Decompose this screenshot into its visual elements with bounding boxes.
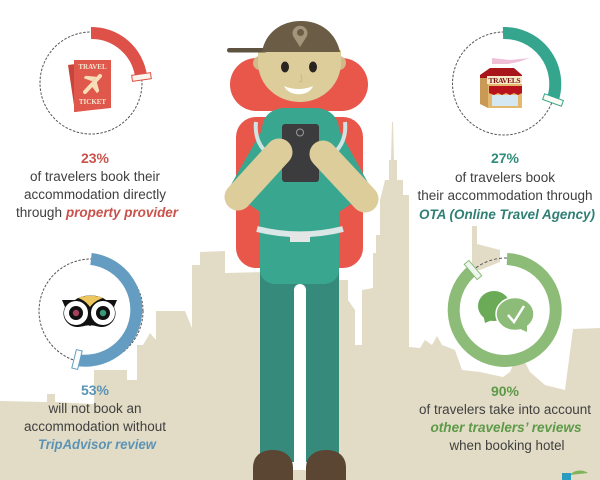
- cap brim: [227, 48, 267, 52]
- smile: [284, 86, 313, 94]
- dashed ring: [40, 32, 142, 134]
- panel: traveler reviews stat: [419, 258, 591, 453]
- city skyline background: [0, 122, 600, 480]
- dashed ring segment: [473, 258, 507, 270]
- phone camera: [296, 129, 304, 136]
- cap pin hole: [297, 29, 304, 36]
- arc end tab: [72, 350, 82, 369]
- sign text: TRAVELS: [488, 76, 520, 85]
- front speech bubble: [496, 298, 534, 330]
- right arm: [323, 154, 365, 199]
- percentage: 27%: [491, 150, 520, 166]
- small tower behind green ring: [472, 226, 500, 270]
- right eye white: [91, 301, 115, 325]
- belt: [257, 229, 343, 234]
- small corner logo: [562, 471, 588, 480]
- panel: online travel agency stat: [418, 32, 595, 222]
- description: of travelers take into account: [419, 402, 591, 417]
- nose: [299, 74, 302, 82]
- owl forehead: [78, 296, 103, 307]
- ticket back: [68, 62, 90, 112]
- flag: [492, 58, 530, 64]
- check mark: [508, 306, 524, 322]
- description: will not book an: [48, 401, 142, 416]
- left shoe: [253, 450, 293, 480]
- dashed ring: [452, 32, 556, 135]
- ticket label: TICKET: [79, 98, 106, 106]
- teal progress arc: [503, 33, 555, 99]
- right shoe: [306, 450, 346, 480]
- description: through: [16, 205, 62, 220]
- left ear: [253, 56, 267, 70]
- description: property provider: [65, 205, 179, 220]
- right iris: [100, 310, 106, 316]
- logo block: [562, 473, 571, 480]
- logo hill: [570, 471, 588, 475]
- description: [16, 169, 179, 220]
- roof: [480, 68, 522, 78]
- arc end tab: [543, 94, 563, 106]
- percentage: 23%: [81, 150, 110, 166]
- description: their accommodation through: [418, 188, 592, 203]
- backpack bedroll: [230, 58, 368, 111]
- airplane glyph: [84, 76, 100, 93]
- description: other travelers’ reviews: [430, 420, 582, 435]
- belt buckle: [290, 232, 310, 242]
- torso shirt: [228, 108, 372, 284]
- panel: property provider stat: [16, 32, 179, 220]
- description: accommodation without: [24, 419, 166, 434]
- ticket front: [74, 60, 111, 112]
- right backpack strap: [337, 122, 345, 150]
- left iris: [73, 310, 79, 316]
- ticket title: TRAVEL: [78, 63, 107, 71]
- panel: TripAdvisor stat: [24, 259, 166, 452]
- cap dome: [262, 21, 340, 52]
- description: OTA (Online Travel Agency): [419, 207, 595, 222]
- left eye ring: [69, 306, 83, 320]
- description: [419, 402, 591, 453]
- right ear: [332, 56, 346, 70]
- description: [418, 170, 595, 222]
- green progress arc: [454, 259, 556, 361]
- shop side wall: [480, 74, 488, 108]
- traveler figure: [227, 21, 372, 480]
- left eye: [281, 62, 289, 72]
- back speech bubble: [478, 291, 510, 323]
- blue progress arc: [77, 259, 136, 361]
- legs: [260, 270, 339, 462]
- left eye white: [64, 301, 88, 325]
- description: of travelers book their: [30, 169, 161, 184]
- description: when booking hotel: [449, 438, 564, 453]
- arc end tab: [464, 260, 482, 280]
- description: of travelers book: [455, 170, 555, 185]
- icon: TripAdvisor owl: [62, 296, 117, 327]
- shop sign: [487, 76, 522, 84]
- description: accommodation directly: [24, 187, 166, 202]
- dashed ring: [39, 259, 143, 363]
- shop front wall: [488, 76, 522, 108]
- red progress arc: [91, 33, 141, 76]
- left backpack strap: [256, 122, 264, 150]
- cap location pin: [292, 26, 308, 47]
- icon: travels shop: [480, 58, 530, 108]
- right eye ring: [96, 306, 110, 320]
- right eye: [309, 62, 317, 72]
- description: TripAdvisor review: [38, 437, 157, 452]
- arc end tab: [132, 73, 151, 81]
- percentage: 90%: [491, 383, 520, 399]
- backpack body: [236, 117, 363, 268]
- percentage: 53%: [81, 382, 110, 398]
- left arm: [238, 152, 279, 197]
- description: [24, 401, 166, 452]
- awning: [489, 86, 522, 95]
- icon: chat bubbles: [478, 291, 534, 332]
- phone: [282, 124, 319, 182]
- owl head: [62, 296, 117, 327]
- front bubble tail: [518, 322, 527, 332]
- window: [492, 95, 518, 106]
- icon: travel ticket: [68, 60, 111, 112]
- face: [258, 50, 341, 102]
